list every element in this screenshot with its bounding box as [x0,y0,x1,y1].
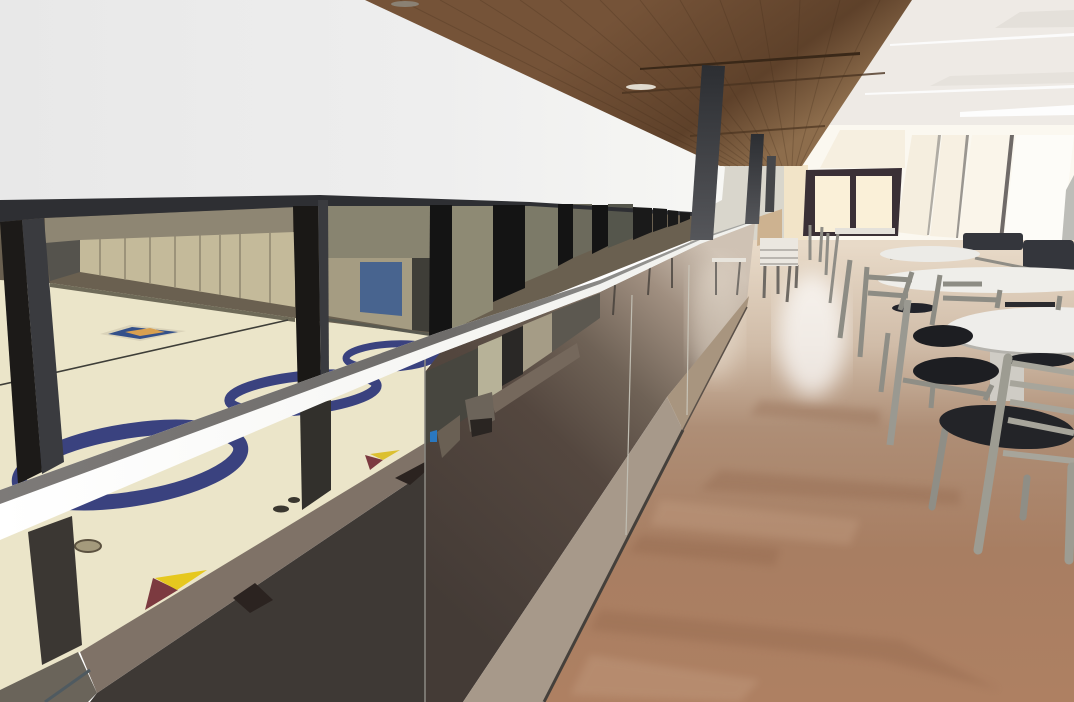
far tan panel beyond balustrade [757,209,782,246]
rink ice [0,280,430,690]
near chair [932,358,1074,560]
back row chairs [840,260,1074,367]
far chairs and tables [810,225,1035,303]
stacked tables near balustrade end [760,238,798,302]
window columns [0,200,690,665]
right ceiling [780,0,1074,240]
lower glass balustrade [425,223,755,702]
window frame beam [0,195,692,222]
beam reflection in glass [430,343,580,458]
white wall [0,0,725,214]
floor-level tan strip [425,265,749,702]
rink markings [0,320,439,516]
rink corner triangles [145,450,400,610]
steel columns [690,65,776,240]
wood slat ceiling [365,0,912,166]
white handrail [0,220,755,540]
far windows [782,125,1074,245]
back of rink room [0,204,692,500]
rink stones and drain [75,497,300,552]
dark panel below beam [90,472,425,702]
tan beam seen through glass [0,443,425,702]
round tables [878,246,1074,401]
double doors [803,168,902,236]
wood floor [545,240,1074,702]
far sofas [963,233,1074,275]
rink back wall cabinets and reflections [45,204,633,336]
far end wall [690,150,784,245]
second chair [881,300,999,445]
